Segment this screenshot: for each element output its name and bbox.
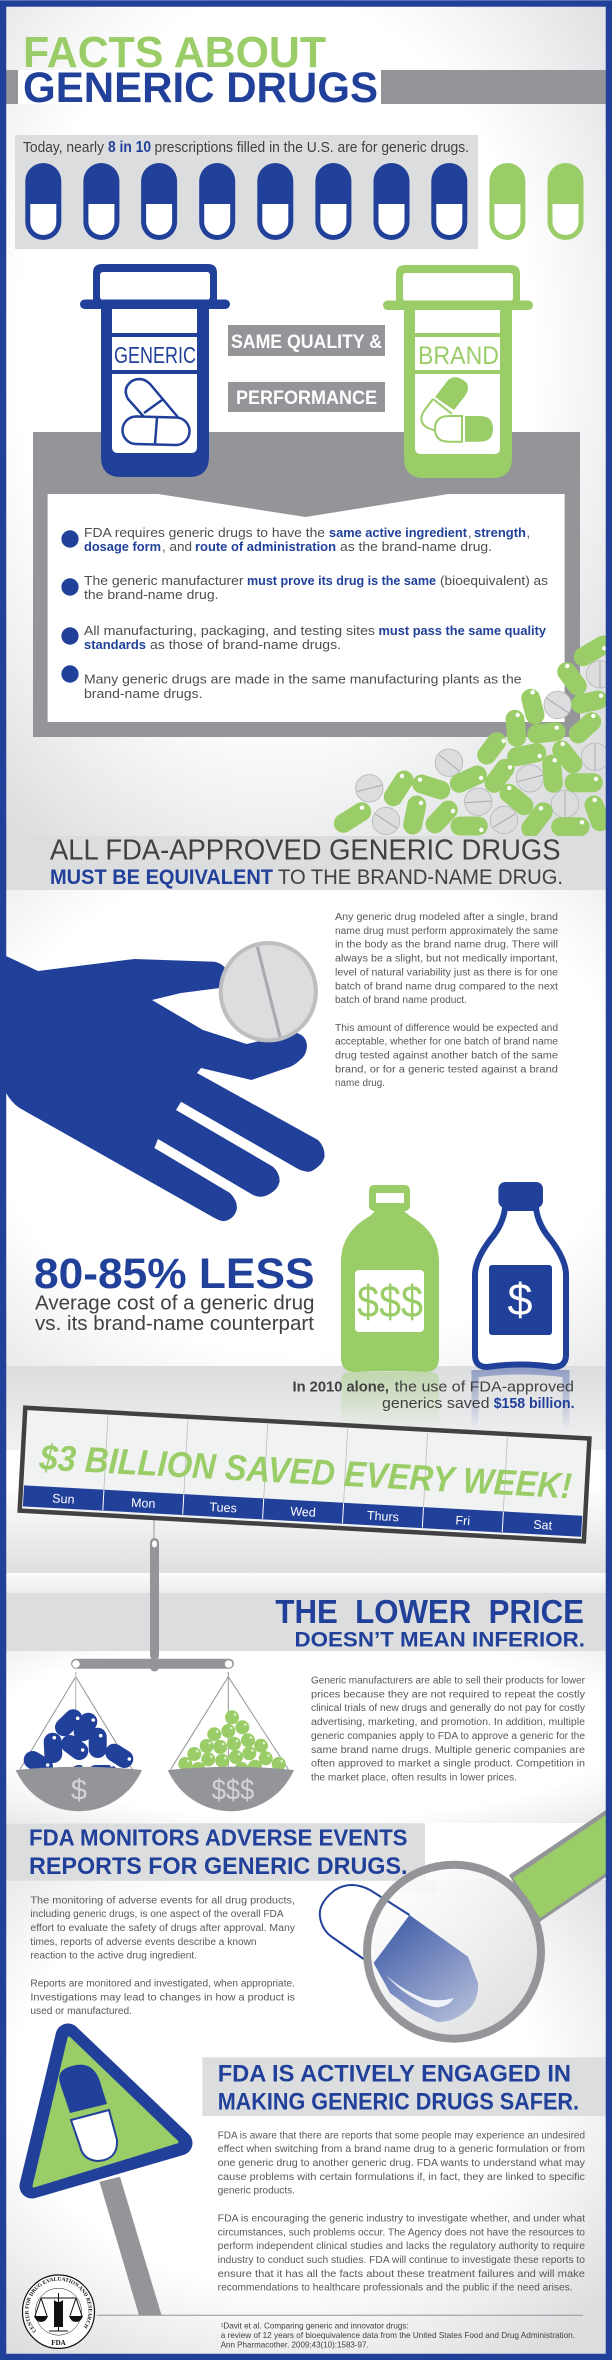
text block: natural variability: This amount of difference would be expected and — [335, 1023, 558, 1034]
text block: FDA investigations — [218, 2130, 586, 2294]
seal: Center for Drug Evaluation and Research: FDA — [51, 2339, 66, 2347]
text block: FDA investigations: recommendations to healthcare professionals and the public if the need arises. — [218, 2283, 573, 2294]
heading band: FDA monitors: REPORTS FOR GENERIC DRUGS. — [29, 1853, 408, 1880]
bullet 4: brand-name drugs. — [84, 686, 202, 701]
text block: why lower price — [311, 1676, 586, 1783]
text block: monitoring adverse events — [30, 1895, 295, 2017]
balance scale — [16, 1659, 294, 1811]
text block: natural variability: acceptable, whether for one batch of brand name — [335, 1037, 559, 1048]
bullet 2: The generic manufacturer — [84, 573, 244, 588]
text block: natural variability: drug tested against another batch of the same — [335, 1050, 559, 1062]
pile of pills — [343, 645, 612, 835]
sign headline: $3 BILLION SAVED EVERY WEEK! — [38, 1436, 573, 1506]
weekday labels: Thurs — [367, 1509, 399, 1524]
right pan bowl: $$$ — [212, 1774, 254, 1806]
bullet 4 — [61, 665, 522, 701]
text block: natural variability: name drug. — [335, 1078, 385, 1089]
bullet 2: must prove its drug is the same — [247, 573, 436, 588]
bullet 3 — [61, 623, 547, 652]
bullet 2 — [61, 573, 548, 602]
icon: brand bottle — [383, 265, 533, 478]
bullet 1: , — [526, 525, 530, 540]
weekday labels — [52, 1491, 553, 1533]
text block: monitoring adverse events: The monitoring of adverse events for all drug products, — [30, 1895, 295, 1906]
stat: 2010 savings: In 2010 alone, — [292, 1380, 389, 1396]
heading band: must be equivalent: MUST BE EQUIVALENT — [50, 866, 273, 889]
icon: green bottle with triple dollar: $$$ — [357, 1276, 423, 1327]
footnote: citation: ¹Davit et al. Comparing generic and innovator drugs: — [221, 2320, 409, 2330]
stat: 2010 savings: the use of FDA-approved — [395, 1380, 574, 1396]
bullet 1: strength — [474, 525, 526, 540]
weekday labels: Fri — [455, 1513, 470, 1528]
right pan: green tablets — [171, 1672, 288, 1776]
bullet 3: as those of brand-name drugs. — [150, 637, 341, 652]
icon: generic bottle: GENERIC — [114, 342, 196, 368]
heading band: FDA monitors — [6, 1823, 437, 1893]
icon: hand holding tablet — [6, 943, 325, 1221]
text block: FDA investigations: generic products. — [218, 2186, 295, 2197]
footnote: citation: Ann Pharmacother. 2009;43(10):1583-97. — [221, 2339, 369, 2349]
stat: 80-85% less: Average cost of a generic drug — [35, 1292, 314, 1314]
text block: why lower price: generic companies apply to FDA to approve a generic for the — [311, 1731, 586, 1742]
weekday labels: Sat — [533, 1518, 553, 1533]
stat: 2010 savings — [292, 1380, 574, 1412]
heading band: FDA monitors: FDA MONITORS ADVERSE EVENTS — [29, 1824, 408, 1850]
icon: blue bottle with single dollar — [475, 1182, 566, 1367]
text block: FDA investigations: FDA is encouraging the generic industry to investigate whether, and under what — [218, 2213, 585, 2224]
bullet 1: same active ingredient — [329, 525, 468, 540]
prescriptions statement: Today, nearly — [23, 140, 105, 156]
left pan bowl: $ — [71, 1774, 87, 1806]
label: same quality and performance: SAME QUALITY & — [231, 332, 382, 353]
text block: why lower price: same brand name drugs. Multiple generic companies are — [311, 1745, 586, 1756]
heading band: must be equivalent: TO THE BRAND-NAME DRUG. — [278, 866, 563, 889]
seal: Center for Drug Evaluation and Research: CENTER FOR DRUG EVALUATION AND RESEARCH — [25, 2277, 92, 2332]
weekday labels: Sun — [52, 1491, 75, 1507]
text block: FDA investigations: one generic drug to another generic drug. FDA wants to understand what may — [218, 2158, 585, 2169]
text block: natural variability — [335, 912, 559, 1089]
green capsules — [343, 645, 603, 828]
grey tablets — [356, 661, 612, 835]
text block: FDA investigations: perform independent clinical studies and lacks the regulatory authority to require — [218, 2241, 586, 2252]
stat: 2010 savings: generics saved — [382, 1396, 490, 1412]
prescriptions statement — [23, 139, 469, 156]
bullet 2: (bioequivalent) as — [440, 573, 548, 588]
bullet 1: , — [468, 525, 472, 540]
text block: monitoring adverse events: reaction to the active drug ingredient. — [30, 1951, 197, 1962]
prescriptions statement: 8 in 10 — [108, 139, 151, 156]
text block: FDA investigations: FDA is aware that there are reports that some people may experience an undesired — [218, 2130, 585, 2141]
text block: monitoring adverse events: Investigations may lead to changes in how a product is — [30, 1992, 295, 2003]
icon: generic bottle — [80, 264, 230, 477]
icon: bottle reflections — [341, 1370, 566, 1430]
capsule row: 8 blue, 2 green — [25, 163, 584, 240]
right pan bowl — [168, 1767, 294, 1811]
calendar sign: three billion saved every week — [20, 1408, 589, 1541]
text block: why lower price: prices because they are not required to repeat the costly — [311, 1689, 585, 1700]
heading band: FDA engaged: FDA IS ACTIVELY ENGAGED IN — [218, 2061, 571, 2088]
footer rule — [97, 2314, 583, 2316]
bullet 1: as the brand-name drug. — [340, 539, 492, 554]
text block: why lower price: advertising, marketing, and promotion. In addition, multiple — [311, 1717, 586, 1728]
scale beam — [71, 1659, 234, 1672]
bullet 1: dosage form — [84, 539, 161, 554]
label: same quality and performance — [228, 325, 385, 412]
text block: monitoring adverse events: effort to evaluate the safety of drugs after approval. Many — [30, 1923, 295, 1934]
text block: natural variability: level of natural variability just as there is for one — [335, 967, 559, 978]
text block: monitoring adverse events: used or manufactured. — [30, 2006, 132, 2017]
text block: natural variability: Any generic drug modeled after a single, brand — [335, 912, 558, 923]
text block: FDA investigations: ensure that it has all the facts about these treatment failures and will make — [218, 2269, 586, 2280]
heading band: lower price — [6, 1593, 606, 1652]
text block: natural variability: batch of brand name product. — [335, 995, 467, 1006]
text block: why lower price: the market place, often results in lower prices. — [311, 1772, 517, 1783]
text block: natural variability: name drug must perform approximately the same — [335, 926, 559, 937]
bullet 1: , and — [162, 539, 192, 554]
left pan bowl — [16, 1767, 142, 1811]
bullet 2: the brand-name drug. — [84, 587, 218, 602]
text block: FDA investigations: industry to conduct such studies. FDA will continue to investigate these reports to — [218, 2255, 586, 2266]
heading band: FDA engaged — [202, 2057, 606, 2116]
text block: why lower price: clinical trials of new drugs and generally do not pay for costly — [311, 1703, 585, 1714]
bullet 4: Many generic drugs are made in the same manufacturing plants as the — [84, 672, 522, 686]
heading band: lower price: DOESN’T MEAN INFERIOR. — [294, 1628, 585, 1652]
stat: 2010 savings: $158 billion. — [494, 1396, 574, 1412]
panel: grey comparison box — [33, 432, 580, 737]
text block: monitoring adverse events: including generic drugs, is one aspect of the overall FDA — [30, 1909, 284, 1920]
stat: 80-85% less: 80-85% LESS — [34, 1250, 314, 1298]
footnote: citation: a review of 12 years of bioequivalence data from the United States Food and Drug Administration. — [221, 2330, 575, 2340]
pill highlights — [360, 646, 606, 832]
left pan: blue capsules — [20, 1672, 132, 1776]
label: same quality and performance: PERFORMANCE — [236, 388, 377, 409]
text block: natural variability: brand, or for a generic tested against a brand — [335, 1064, 558, 1075]
icon: magnifying glass over capsule — [320, 1810, 606, 2039]
text block: natural variability: batch of brand name drug compared to the next — [335, 981, 558, 992]
heading band: FDA engaged: MAKING GENERIC DRUGS SAFER. — [218, 2088, 579, 2115]
panel: 8 in 10 prescriptions — [15, 135, 584, 249]
text block: why lower price: often approved to market a single product. Competition in — [311, 1759, 585, 1770]
bullet 3: standards — [84, 637, 146, 652]
icon: green bottle with triple dollar — [341, 1185, 439, 1372]
text block: monitoring adverse events: times, reports of adverse events describe a known — [30, 1937, 257, 1948]
text block: natural variability: in the body as the brand name drug. There will — [335, 940, 558, 951]
title: GENERIC DRUGS — [23, 64, 378, 112]
bullet list: sameness requirements — [61, 525, 548, 701]
stat: 80-85% less — [34, 1250, 314, 1335]
heading band: lower price: THE LOWER PRICE — [275, 1593, 584, 1630]
text block: natural variability: always be a slight, but not medically important, — [335, 954, 558, 965]
bullet 3: All manufacturing, packaging, and testing sites — [84, 623, 375, 638]
weekday labels: Mon — [131, 1496, 156, 1511]
title: FACTS ABOUT — [23, 28, 326, 77]
prescriptions statement: prescriptions filled in the U.S. are for generic drugs. — [154, 140, 469, 156]
bullet 1: route of administration — [195, 539, 336, 554]
stat: 80-85% less: vs. its brand-name counterpart — [35, 1313, 314, 1335]
icon: brand bottle: BRAND — [418, 342, 499, 370]
bullet 3: must pass the same quality — [378, 623, 547, 638]
weekday labels: Wed — [290, 1504, 316, 1520]
text block: monitoring adverse events: Reports are monitored and investigated, when appropriate. — [30, 1978, 295, 1989]
bullet 1 — [61, 525, 530, 554]
icon: blue bottle with single dollar: $ — [507, 1274, 533, 1325]
bullet 1: FDA requires generic drugs to have the — [84, 525, 325, 540]
title — [6, 28, 606, 112]
text block: FDA investigations: cause problems with certain formulations if, in fact, they are linked to specific — [218, 2172, 585, 2183]
heading band: must be equivalent: ALL FDA-APPROVED GENERIC DRUGS — [50, 834, 560, 866]
text block: FDA investigations: effect when switching from a brand name drug to a generic formulation or from — [218, 2144, 585, 2155]
heading band: must be equivalent — [6, 834, 606, 890]
icon: warning sign with capsule — [32, 2036, 180, 2315]
text block: FDA investigations: circumstances, such problems occur. The Agency does not have the resources to — [218, 2227, 586, 2238]
scale hanger string and rod — [150, 1520, 159, 1660]
weekday labels: Tues — [209, 1500, 237, 1515]
footnote: citation — [221, 2320, 575, 2349]
text block: why lower price: Generic manufacturers are able to sell their products for lower — [311, 1676, 586, 1686]
